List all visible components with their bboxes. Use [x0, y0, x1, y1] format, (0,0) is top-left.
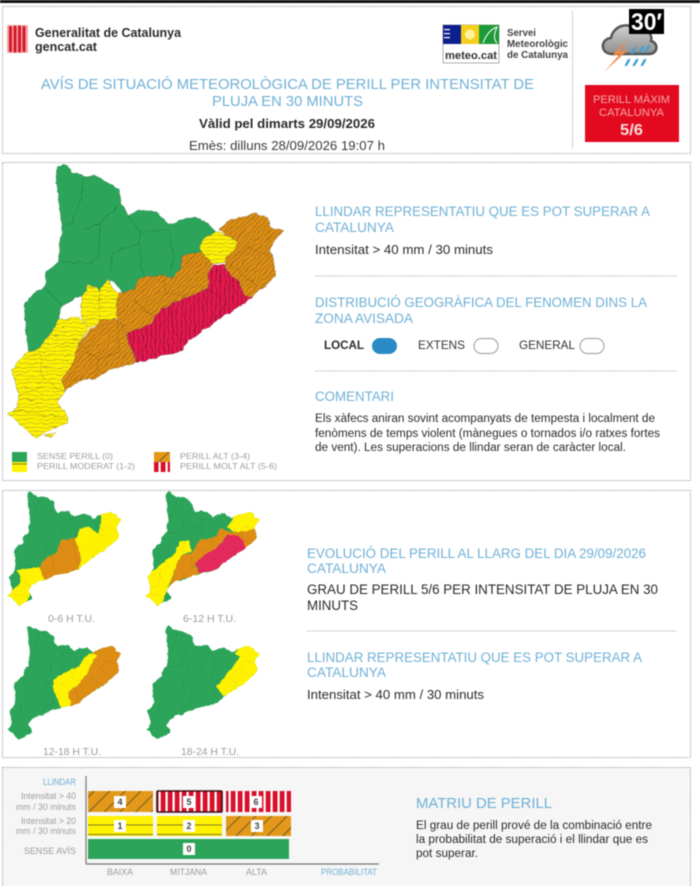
- chart: matrix: mm / 30 minuts: [16, 802, 76, 812]
- text block: comment: [315, 389, 660, 454]
- title: [41, 76, 534, 110]
- text block: threshold: Intensitat > 40 mm / 30 minuts: [315, 242, 494, 257]
- chart: matrix: SENSE AVÍS: [24, 846, 76, 856]
- text block: danger evolution: GRAU DE PERILL 5/6 PER INTENSITAT DE PLUJA EN 30: [307, 582, 658, 597]
- chart: matrix: Intensitat > 20: [21, 816, 76, 826]
- text block: comment: COMENTARI: [315, 389, 394, 404]
- time labels: 18-24 H T.U.: [181, 746, 239, 758]
- map legend: PERILL ALT (3-4): [180, 452, 250, 461]
- callout: maximum danger: CATALUNYA: [599, 107, 665, 119]
- chart: matrix: 3: [254, 821, 260, 831]
- text block: matrix explanation: la probabilitat de superació i el llindar que es: [416, 834, 648, 846]
- map legend: [12, 452, 277, 472]
- issue date: Emès: dilluns 28/09/2026 19:07 h: [189, 138, 385, 153]
- map legend: SENSE PERILL (0): [37, 452, 113, 461]
- text block: representative threshold: LLINDAR REPRESENTATIU QUE ES POT SUPERAR A: [307, 650, 642, 665]
- time labels: 6-12 H T.U.: [183, 613, 236, 625]
- map: Catalonia danger zones: [7, 164, 283, 439]
- chart: matrix: Intensitat > 40: [21, 791, 76, 801]
- map: 0-6 h: [6, 490, 122, 606]
- map: 6-12 h: [144, 490, 260, 606]
- callout: maximum danger: PERILL MÀXIM: [593, 93, 670, 106]
- chart: matrix: 6: [253, 797, 259, 807]
- selector: extent: GENERAL: [519, 338, 575, 352]
- selector: extent: EXTENS: [418, 338, 465, 352]
- chart: matrix: [16, 776, 379, 877]
- top black bar: [0, 0, 700, 3]
- text block: threshold: [315, 204, 650, 257]
- text block: matrix explanation: pot superar.: [416, 848, 478, 860]
- map: 12-18 h: [7, 626, 122, 740]
- time labels: 12-18 H T.U.: [43, 746, 101, 758]
- chart: matrix: LLINDAR: [43, 777, 76, 787]
- map legend: PERILL MODERAT (1-2): [37, 462, 135, 471]
- Servei Meteorològic name: Meteorològic: [507, 39, 568, 50]
- selector: extent: LOCAL: [324, 338, 364, 352]
- icon: meteo.cat logo: [443, 25, 499, 63]
- title: PLUJA EN 30 MINUTS: [212, 93, 363, 110]
- selector: extent: [324, 338, 604, 354]
- Generalitat name: [35, 26, 182, 54]
- chart: matrix: 0: [186, 844, 192, 854]
- map legend: PERILL MOLT ALT (5-6): [180, 462, 277, 471]
- text block: matrix explanation: El grau de perill prové de la combinació entre: [416, 820, 652, 832]
- text block: representative threshold: CATALUNYA: [307, 665, 386, 680]
- text block: danger evolution: CATALUNYA: [307, 561, 386, 576]
- Servei Meteorològic name: de Catalunya: [507, 50, 568, 61]
- time labels: 0-6 H T.U.: [48, 613, 95, 625]
- text block: threshold: CATALUNYA: [315, 220, 394, 235]
- panel: header: [2, 6, 690, 154]
- chart: matrix: MITJANA: [170, 867, 207, 877]
- map: 18-24 h: [146, 624, 260, 740]
- Servei Meteorològic name: Servei: [507, 28, 536, 39]
- chart: matrix: mm / 30 minuts: [16, 826, 76, 836]
- text block: matrix explanation: MATRIU DE PERILL: [416, 796, 552, 812]
- callout: maximum danger: [585, 85, 679, 142]
- text block: comment: fenòmens de temps violent (mànegues o tornados i/o ratxes fortes: [315, 428, 660, 440]
- panel: main map and description: [2, 162, 690, 480]
- text block: threshold: LLINDAR REPRESENTATIU QUE ES POT SUPERAR A: [315, 204, 650, 219]
- text block: comment: de vent). Les superacions de llindar seran de caràcter local.: [315, 442, 626, 454]
- icon: Generalitat logo: [7, 25, 28, 53]
- chart: matrix: 2: [186, 821, 192, 831]
- text block: matrix explanation: [416, 796, 652, 860]
- text block: danger evolution: MINUTS: [307, 598, 358, 613]
- Generalitat name: Generalitat de Catalunya: [35, 26, 182, 40]
- text block: representative threshold: [307, 650, 642, 702]
- panel: danger matrix: [2, 768, 690, 886]
- callout: maximum danger: 5/6: [620, 122, 643, 139]
- chart: matrix: ALTA: [246, 867, 267, 877]
- icon: storm cloud: [603, 9, 664, 72]
- text block: geographic distribution: [315, 295, 647, 326]
- text block: geographic distribution: DISTRIBUCIÓ GEOGRÀFICA DEL FENOMEN DINS LA: [315, 295, 647, 310]
- text block: danger evolution: [307, 546, 658, 613]
- chart: matrix: 5: [186, 797, 192, 807]
- text block: geographic distribution: ZONA AVISADA: [315, 311, 413, 326]
- Servei Meteorològic name: [507, 28, 568, 61]
- chart: matrix: 4: [117, 797, 123, 807]
- text block: danger evolution: EVOLUCIÓ DEL PERILL AL LLARG DEL DIA 29/09/2026: [307, 546, 646, 561]
- panel: evolution during the day: [0, 490, 690, 758]
- chart: matrix: 1: [117, 821, 123, 831]
- title: AVÍS DE SITUACIÓ METEOROLÒGICA DE PERILL PER INTENSITAT DE: [41, 76, 534, 93]
- Generalitat name: gencat.cat: [35, 40, 98, 54]
- chart: matrix: BAIXA: [107, 867, 133, 877]
- time labels: [43, 613, 239, 758]
- text block: representative threshold: Intensitat > 40 mm / 30 minuts: [307, 687, 485, 702]
- text block: comment: Els xàfecs aniran sovint acompanyats de tempesta i localment de: [315, 413, 655, 425]
- chart: matrix: PROBABILITAT: [321, 867, 377, 877]
- validity date: Vàlid pel dimarts 29/09/2026: [199, 116, 375, 131]
- icon: meteo.cat logo: meteo.cat: [445, 50, 497, 62]
- icon: storm cloud: 30′: [631, 9, 662, 36]
